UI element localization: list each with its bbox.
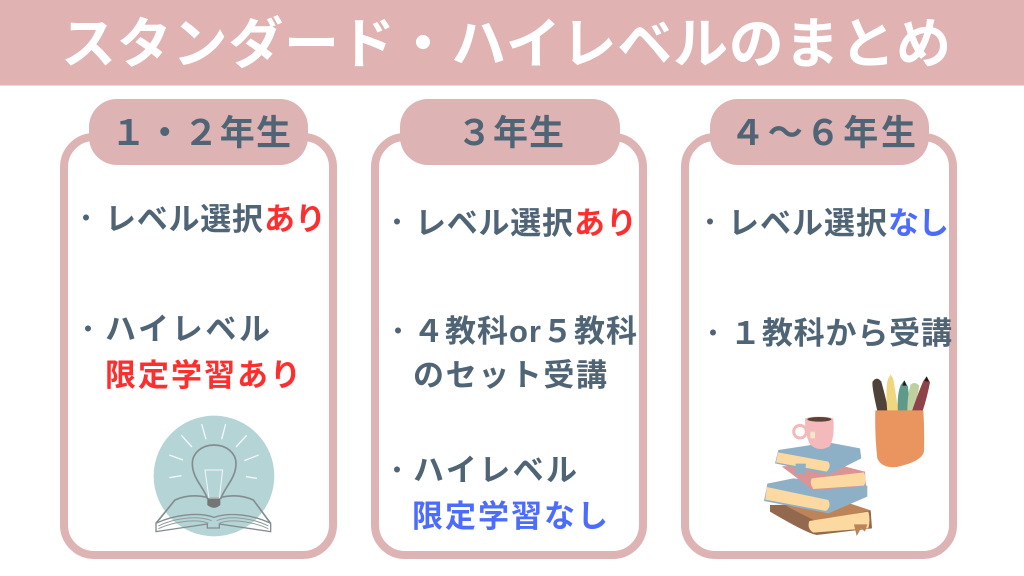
title: スタンダード・ハイレベルのまとめ <box>61 13 951 75</box>
heading pill: grades 1-2: １・２年生 <box>111 114 291 153</box>
text: 4 or 5 subject set enrollment: ・ <box>384 316 412 347</box>
text: level selection yes: あり <box>264 202 326 237</box>
text: level selection yes: レベル選択 <box>415 206 573 241</box>
text: enroll from one subject: ・ <box>699 318 727 349</box>
heading pill: grades 4-6: ４～６年生 <box>730 114 916 153</box>
text: level selection none: レベル選択 <box>728 206 887 241</box>
text: level selection yes: あり <box>574 206 637 241</box>
text: level selection yes <box>383 206 637 241</box>
text: enroll from one subject: １教科から受講 <box>730 316 952 351</box>
heading pill: grade 3: ３年生 <box>457 114 564 153</box>
heading pill: grade 3 <box>400 99 620 165</box>
panel: grades 4-6 <box>685 99 953 555</box>
text: high level limited study yes: 限定学習あり <box>105 358 301 393</box>
text: high level limited study none: 限定学習なし <box>412 499 608 534</box>
panel: grade 3 <box>375 99 643 555</box>
text: high level limited study none <box>383 453 608 534</box>
icon: light bulb and open book <box>154 416 274 536</box>
title banner <box>0 0 1024 86</box>
heading pill: grades 1-2 <box>89 99 308 165</box>
text: level selection none <box>696 206 949 241</box>
text: 4 or 5 subject set enrollment <box>384 314 637 393</box>
text: level selection yes: ・ <box>72 203 100 234</box>
text: 4 or 5 subject set enrollment: のセット受講 <box>413 358 607 393</box>
text: high level limited study yes <box>74 312 301 393</box>
heading pill: grades 4-6 <box>710 99 929 165</box>
text: level selection none: なし <box>888 206 949 241</box>
icon: pen cup <box>872 374 930 467</box>
text: level selection yes <box>72 202 326 237</box>
icon: stacked books and coffee cup <box>764 417 872 536</box>
text: high level limited study none: ・ <box>383 455 411 486</box>
text: level selection none: ・ <box>696 207 724 238</box>
text: 4 or 5 subject set enrollment: ４教科or５教科 <box>413 314 637 349</box>
text: level selection yes: レベル選択 <box>105 202 263 237</box>
text: high level limited study yes: ハイレベル <box>105 312 270 347</box>
text: level selection yes: ・ <box>383 207 411 238</box>
text: high level limited study yes: ・ <box>74 314 102 345</box>
text: high level limited study none: ハイレベル <box>413 453 577 488</box>
panel: grades 1-2 <box>64 99 333 555</box>
